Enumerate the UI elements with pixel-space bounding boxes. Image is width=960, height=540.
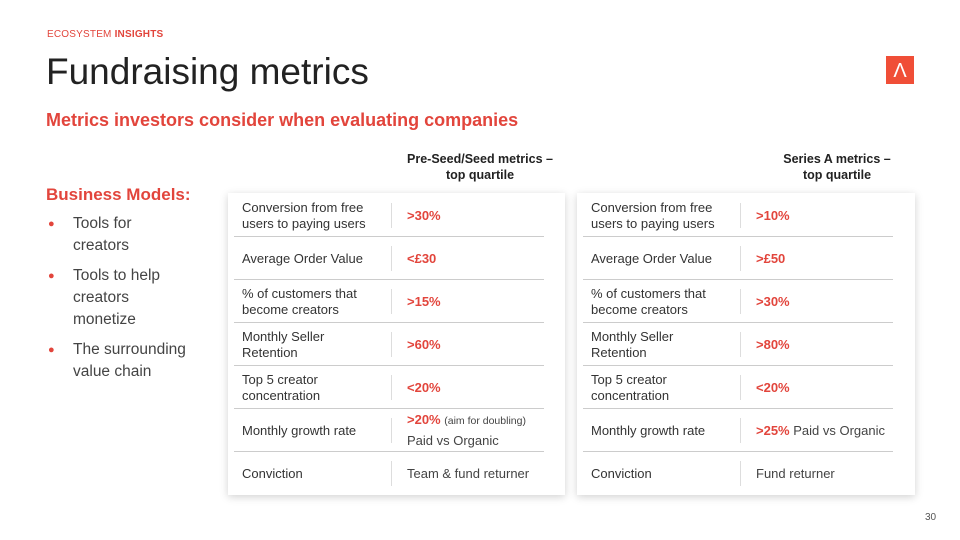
panel: series A metrics table: Conviction [591, 466, 652, 480]
panel: series A metrics table: >£50 [756, 250, 785, 266]
column heading: seed: Pre-Seed/Seed metrics – [407, 152, 553, 166]
column heading: seed: top quartile [446, 168, 514, 182]
panel: series A metrics table: <20% [756, 380, 790, 394]
panel: seed metrics table: Team & fund returner [407, 466, 529, 480]
panel: seed metrics table: >30% [407, 208, 441, 222]
panel: seed metrics table: Top 5 creator concentration [242, 372, 320, 402]
panel: series A metrics table: Average Order Value [591, 250, 712, 266]
panel: seed metrics table: <£30 [407, 250, 436, 266]
title: Fundraising metrics [46, 51, 369, 92]
panel: series A metrics table: >10% [756, 208, 790, 222]
page number: 30 [925, 512, 936, 523]
business models list: ● [48, 270, 55, 282]
panel: seed metrics table: >20% (aim for doubling) [407, 412, 526, 427]
business models list: monetize [73, 311, 136, 328]
panel: seed metrics table: Monthly growth rate [242, 422, 356, 438]
business models list: creators [73, 289, 129, 306]
panel: seed metrics table: >15% [407, 294, 441, 308]
logo icon [886, 56, 914, 84]
column heading: series A: Series A metrics – [783, 152, 891, 166]
panel: seed metrics table: Average Order Value [242, 250, 363, 266]
panel: series A metrics table: Fund returner [756, 466, 835, 480]
panel: series A metrics table: Top 5 creator concentration [591, 372, 669, 402]
panel: seed metrics table: Conversion from free users to paying users [242, 200, 366, 230]
business models list: Tools to help [73, 267, 160, 284]
panel: series A metrics table: Paid vs Organic [793, 422, 885, 438]
panel: series A metrics table: >30% [756, 294, 790, 308]
business models list: The surrounding [73, 341, 186, 358]
business models list: value chain [73, 363, 151, 380]
business models list: creators [73, 237, 129, 254]
panel: series A metrics table: Monthly Seller Retention [591, 328, 673, 360]
panel: series A metrics table: Conversion from free users to paying users [591, 200, 715, 230]
business models list: ● [48, 344, 55, 356]
subtitle: Metrics investors consider when evaluating companies [46, 110, 518, 130]
column heading: series A [783, 152, 891, 182]
panel: series A metrics table: >80% [756, 336, 790, 352]
panel: seed metrics table: <20% [407, 380, 441, 394]
panel: series A metrics table: Monthly growth rate [591, 422, 705, 438]
panel: series A metrics table: >25% [756, 422, 790, 438]
column heading: seed [407, 152, 553, 182]
business models list: Business Models: [46, 185, 191, 204]
logo icon: Λ [893, 60, 907, 82]
panel: seed metrics table: Monthly Seller Retention [242, 328, 324, 360]
panel: seed metrics table: >60% [407, 336, 441, 352]
panel: seed metrics table: % of customers that become creators [242, 286, 357, 316]
business models list: ● [48, 218, 55, 230]
panel: seed metrics table: Conviction [242, 466, 303, 480]
panel: series A metrics table: % of customers that become creators [591, 286, 706, 316]
panel: series A metrics table [577, 193, 915, 495]
panel: seed metrics table [228, 193, 565, 495]
panel: seed metrics table: Paid vs Organic [407, 433, 499, 448]
column heading: series A: top quartile [803, 168, 871, 182]
business models list: Tools for [73, 215, 132, 232]
kicker label: ECOSYSTEM INSIGHTS [47, 29, 163, 40]
business models list [46, 185, 191, 380]
